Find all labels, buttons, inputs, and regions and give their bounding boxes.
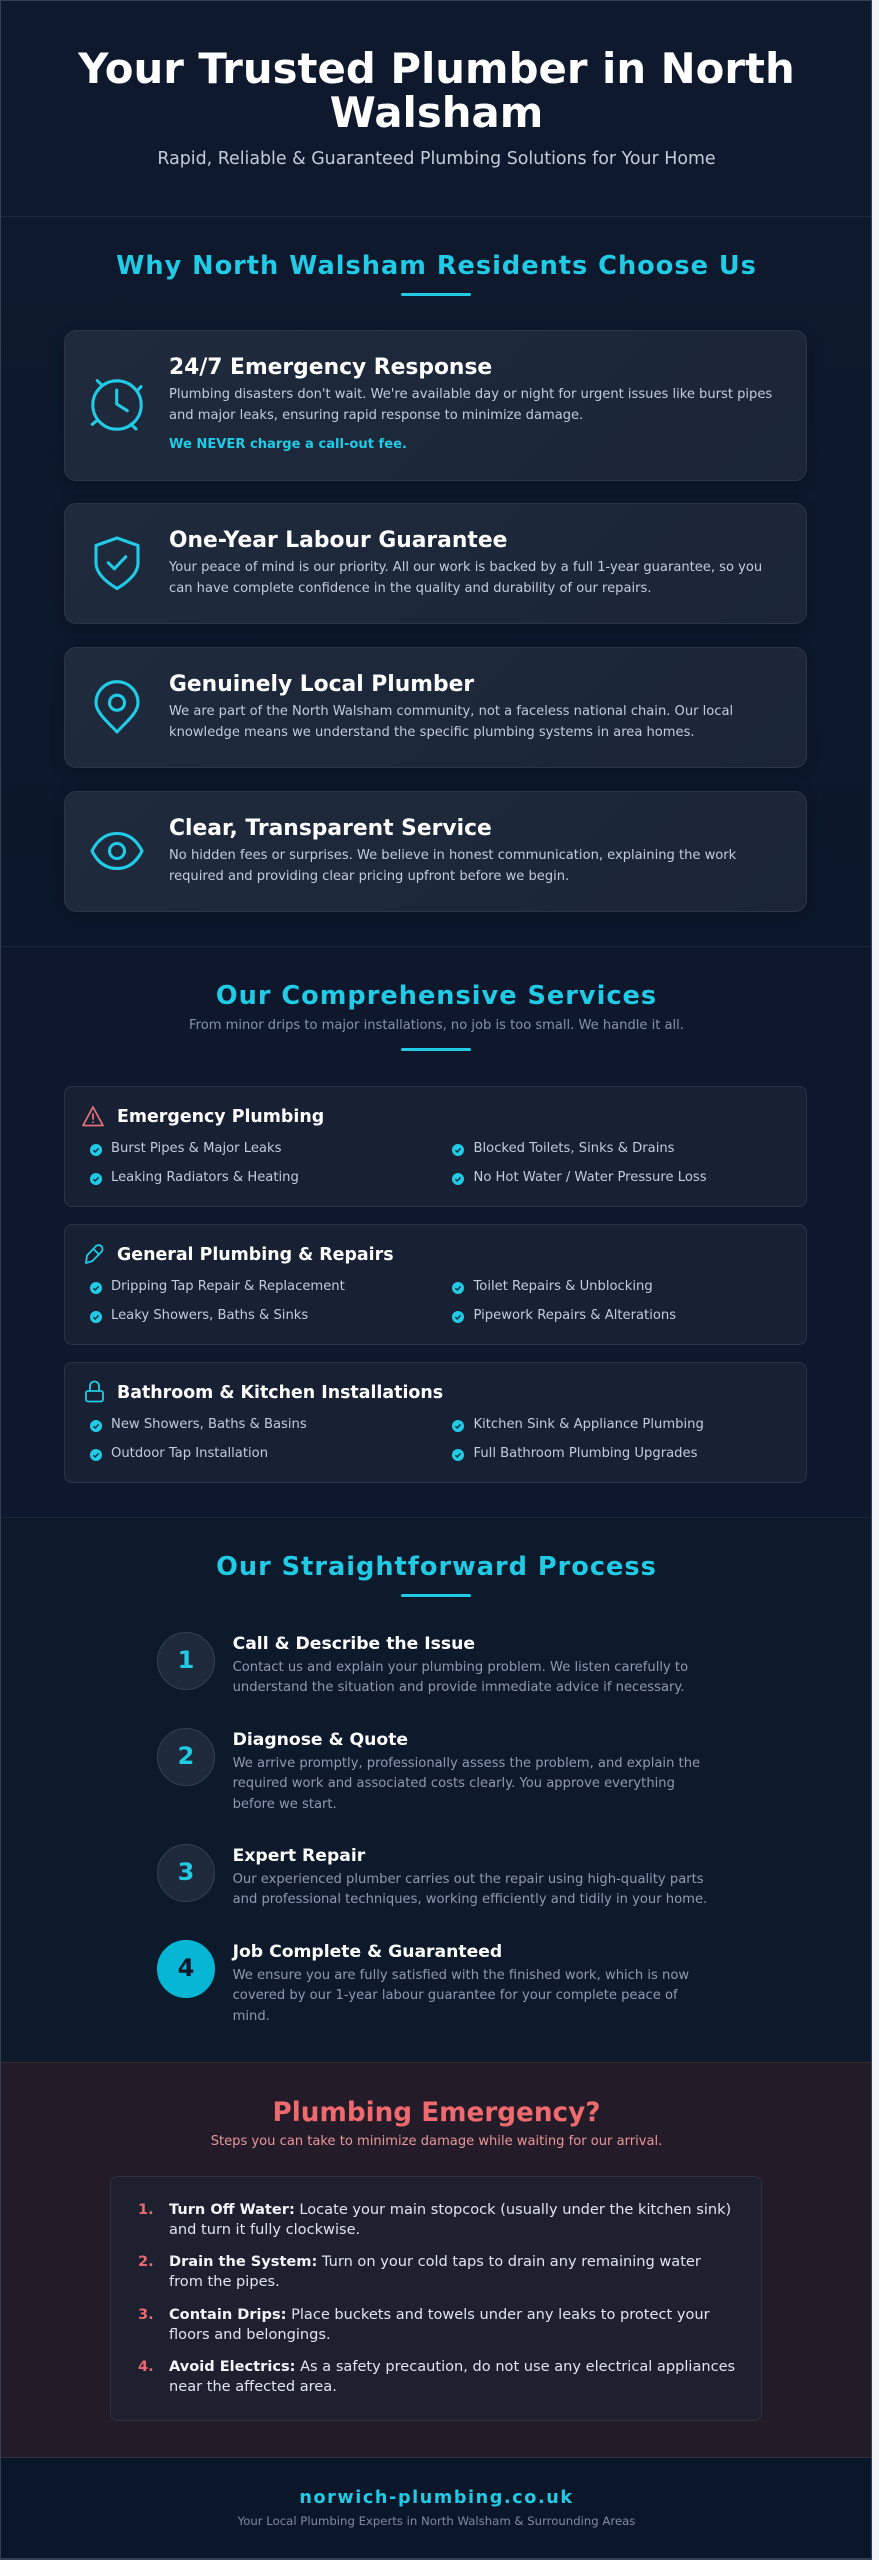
service item text: Leaky Showers, Baths & Sinks: [111, 1308, 308, 1323]
card title: Genuinely Local Plumber: [169, 672, 474, 696]
footer tagline: Your Local Plumbing Experts in North Walsham & Surrounding Areas: [238, 2514, 635, 2528]
website address: norwich-plumbing.co.uk: [299, 2488, 574, 2508]
call-out fee note: We NEVER charge a call-out fee.: [169, 437, 407, 452]
service item: [452, 1144, 464, 1156]
step 3 title: Expert Repair: [233, 1846, 365, 1866]
step 3 description: Our experienced plumber carries out the repair using high-quality parts: [233, 1872, 704, 1887]
heading underline: [401, 1594, 471, 1597]
service card: installations: [64, 1362, 807, 1483]
section heading: Why North Walsham Residents Choose Us: [116, 251, 757, 281]
card description: [169, 560, 762, 596]
card description: can have complete confidence in the quality and durability of our repairs.: [169, 581, 651, 596]
step 4 description: We ensure you are fully satisfied with the finished work, which is now: [233, 1968, 689, 1983]
service title: Bathroom & Kitchen Installations: [117, 1383, 443, 1403]
step 2 number: [157, 1728, 215, 1786]
step 1 description: understand the situation and provide immediate advice if necessary.: [233, 1680, 684, 1695]
emergency subtitle: Steps you can take to minimize damage while waiting for our arrival.: [211, 2134, 662, 2149]
step text 3: [169, 2306, 710, 2343]
section: why choose us: [1, 217, 872, 947]
footer: [1, 2458, 872, 2560]
heading underline: [401, 293, 471, 296]
card: transparent service: [64, 791, 807, 912]
service item: [452, 1311, 464, 1323]
step 3 number: 3: [178, 1858, 194, 1886]
step 1 number: 1: [178, 1646, 194, 1674]
card description: [169, 848, 736, 884]
icon: shield: [94, 536, 140, 590]
step 1 description: [233, 1660, 688, 1695]
step 2 number: 2: [178, 1742, 194, 1770]
card title: 24/7 Emergency Response: [169, 355, 492, 380]
right edge line: [871, 0, 872, 2560]
heading underline: [401, 1048, 471, 1051]
step number 1: 1.: [138, 2201, 154, 2218]
step 4 description: [233, 1968, 689, 2024]
section: process: [1, 1518, 872, 2063]
section heading: Our Straightforward Process: [216, 1552, 657, 1582]
step 4 number: 4: [178, 1954, 194, 1982]
service item: [90, 1173, 102, 1185]
first aid steps panel: [110, 2176, 762, 2421]
section: services: [1, 947, 872, 1518]
step text 4: near the affected area.: [169, 2378, 337, 2395]
card description: required and providing clear pricing upfront before we begin.: [169, 869, 569, 884]
service item: [452, 1173, 464, 1185]
step text 2: Drain the System: Turn on your cold taps to drain any remaining water: [169, 2253, 701, 2270]
step number 4: 4.: [138, 2358, 154, 2375]
service item text: Leaking Radiators & Heating: [111, 1170, 299, 1185]
emergency heading: Plumbing Emergency?: [273, 2098, 600, 2128]
step 1 title: Call & Describe the Issue: [233, 1634, 475, 1654]
service card: emergency plumbing: [64, 1086, 807, 1207]
card title: Clear, Transparent Service: [169, 816, 492, 840]
service item text: Outdoor Tap Installation: [111, 1446, 268, 1461]
step 3 number: [157, 1844, 215, 1902]
step 4 title: Job Complete & Guaranteed: [233, 1942, 502, 1962]
icon: eye: [90, 832, 144, 870]
card description: No hidden fees or surprises. We believe in honest communication, explaining the work: [169, 848, 736, 863]
service item: [90, 1144, 102, 1156]
step 4 description: covered by our 1-year labour guarantee for your complete peace of: [233, 1988, 678, 2003]
step text 2: from the pipes.: [169, 2273, 280, 2290]
card description: [169, 704, 733, 740]
step text 1: [169, 2201, 731, 2238]
step 1 description: Contact us and explain your plumbing problem. We listen carefully to: [233, 1660, 688, 1675]
service item text: Pipework Repairs & Alterations: [474, 1308, 676, 1323]
card: 24/7 emergency response: [64, 330, 807, 481]
step 2 description: [233, 1756, 700, 1812]
step 4 description: mind.: [233, 2009, 270, 2024]
subtitle: Rapid, Reliable & Guaranteed Plumbing Solutions for Your Home: [157, 149, 716, 169]
step text 1: and turn it fully clockwise.: [169, 2221, 360, 2238]
card description: Plumbing disasters don't wait. We're available day or night for urgent issues like burst pipes: [169, 387, 772, 402]
service item: [452, 1449, 464, 1461]
service item text: Dripping Tap Repair & Replacement: [111, 1279, 345, 1294]
service item text: Kitchen Sink & Appliance Plumbing: [474, 1417, 704, 1432]
header: [1, 0, 872, 217]
service item text: Burst Pipes & Major Leaks: [111, 1141, 281, 1156]
top edge line: [1, 0, 872, 1]
card: local plumber: [64, 647, 807, 768]
icon: lock: [85, 1380, 104, 1402]
service item text: Toilet Repairs & Unblocking: [474, 1279, 653, 1294]
title: Walsham: [330, 88, 543, 137]
step number 2: 2.: [138, 2253, 154, 2270]
title: [78, 44, 795, 137]
service item: [452, 1282, 464, 1294]
step text 1: Turn Off Water: Locate your main stopcock (usually under the kitchen sink): [169, 2201, 731, 2218]
icon: map pin: [94, 680, 140, 734]
service item text: No Hot Water / Water Pressure Loss: [474, 1170, 707, 1185]
step 2 description: required work and associated costs clearly. You approve everything: [233, 1776, 675, 1791]
icon: clock: [90, 379, 143, 431]
step 3 description: [233, 1872, 707, 1907]
service item text: New Showers, Baths & Basins: [111, 1417, 307, 1432]
card description: Your peace of mind is our priority. All our work is backed by a full 1-year guarantee, so you: [169, 560, 762, 575]
title: Your Trusted Plumber in North: [78, 44, 795, 93]
step text 2: [169, 2253, 701, 2290]
card title: One-Year Labour Guarantee: [169, 528, 507, 552]
service card: general plumbing: [64, 1224, 807, 1345]
card description: and major leaks, ensuring rapid response to minimize damage.: [169, 408, 583, 423]
step 2 description: before we start.: [233, 1797, 337, 1812]
step 1 number: [157, 1632, 215, 1690]
service item: [90, 1420, 102, 1432]
service item: [90, 1449, 102, 1461]
card description: knowledge means we understand the specific plumbing systems in area homes.: [169, 725, 695, 740]
step 4 number: [157, 1940, 215, 1998]
service item text: Full Bathroom Plumbing Upgrades: [474, 1446, 697, 1461]
service title: Emergency Plumbing: [117, 1107, 324, 1127]
card description: We are part of the North Walsham community, not a faceless national chain. Our local: [169, 704, 733, 719]
card description: [169, 387, 772, 423]
icon: pencil: [85, 1244, 104, 1264]
section: plumbing emergency: [1, 2063, 872, 2458]
service item: [452, 1420, 464, 1432]
section subtitle: From minor drips to major installations, no job is too small. We handle it all.: [189, 1018, 684, 1033]
step number 3: 3.: [138, 2306, 154, 2322]
step 2 description: We arrive promptly, professionally assess the problem, and explain the: [233, 1756, 700, 1771]
service item: [90, 1311, 102, 1323]
step 3 description: and professional techniques, working efficiently and tidily in your home.: [233, 1892, 707, 1907]
service item: [90, 1282, 102, 1294]
step text 3: floors and belongings.: [169, 2326, 331, 2343]
icon: warning triangle: [82, 1106, 104, 1126]
service item text: Blocked Toilets, Sinks & Drains: [474, 1141, 675, 1156]
section heading: Our Comprehensive Services: [216, 981, 657, 1011]
step text 3: Contain Drips: Place buckets and towels under any leaks to protect your: [169, 2306, 710, 2322]
step 2 title: Diagnose & Quote: [233, 1730, 408, 1750]
step text 4: Avoid Electrics: As a safety precaution, do not use any electrical appliances: [169, 2358, 735, 2375]
step text 4: [169, 2358, 735, 2395]
card: labour guarantee: [64, 503, 807, 624]
service title: General Plumbing & Repairs: [117, 1245, 394, 1265]
